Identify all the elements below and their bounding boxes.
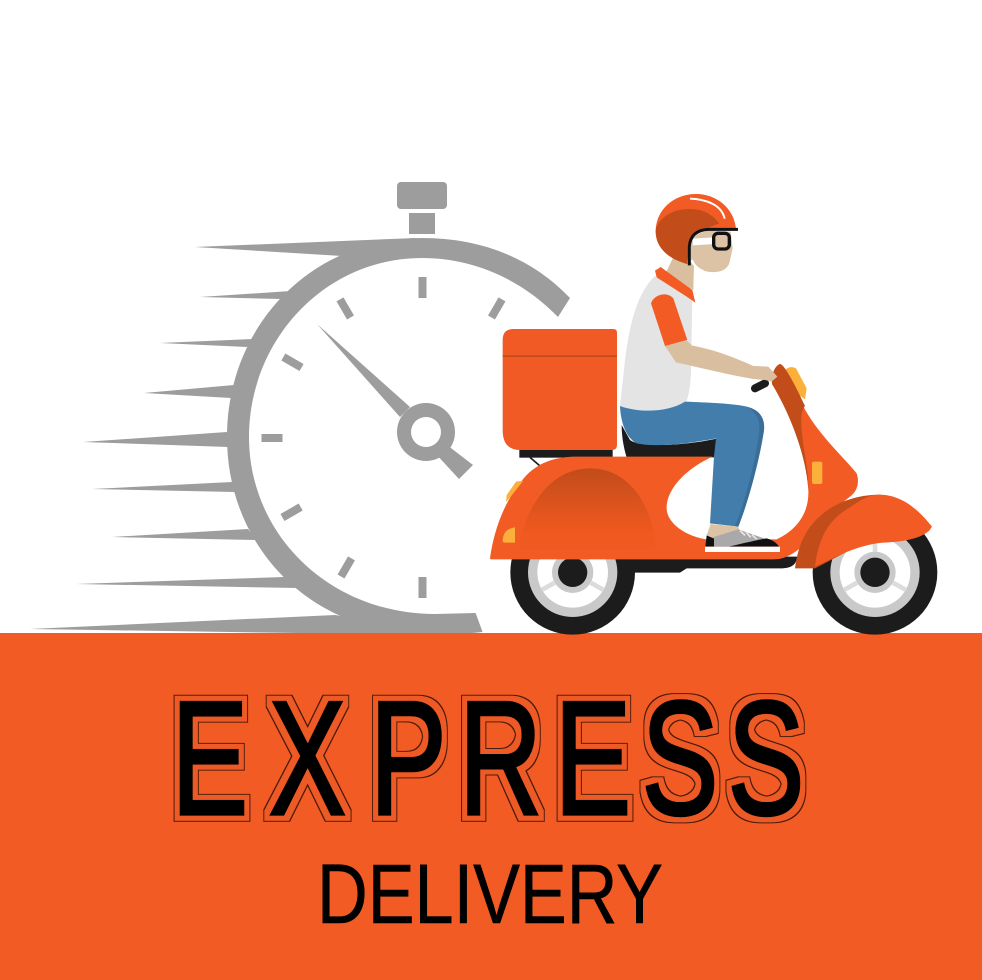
glasses strap [693,241,714,242]
stopwatch knob [397,182,447,234]
delivery box [503,329,617,450]
rider arm [665,341,777,382]
rear wheel arch [519,468,656,549]
shield lamp [812,462,822,484]
helmet [656,194,738,265]
rider trousers [620,402,764,527]
orange ground banner [0,633,982,980]
speed lines [30,238,482,633]
rider neck [665,258,694,290]
scooter under-frame [617,557,798,573]
rear lamp [503,527,515,543]
clock hand [317,324,473,479]
subtitle: delivery: DELIVERY [317,847,663,941]
handle grip [755,383,765,388]
chin strap [692,260,703,271]
scooter body [490,364,858,559]
stopwatch icon with speed lines [30,182,570,633]
rider shoe [705,524,780,552]
scooter and rider illustration [490,194,937,635]
headlight [785,367,807,399]
rider face [691,231,733,272]
rear turn signal [506,481,523,502]
front wheel [813,510,937,635]
title: express: EXPRESS [171,668,804,849]
scooter seat [622,425,717,457]
clock tick marks [262,277,505,598]
handlebar shield shadow [772,364,808,490]
stopwatch ring [227,238,570,633]
rider sleeve [651,294,687,346]
glasses [714,233,729,249]
front fender [795,495,932,568]
rider shirt [620,276,692,411]
delivery box mount [519,448,613,467]
rider collar [655,267,695,303]
rear wheel [510,510,635,635]
